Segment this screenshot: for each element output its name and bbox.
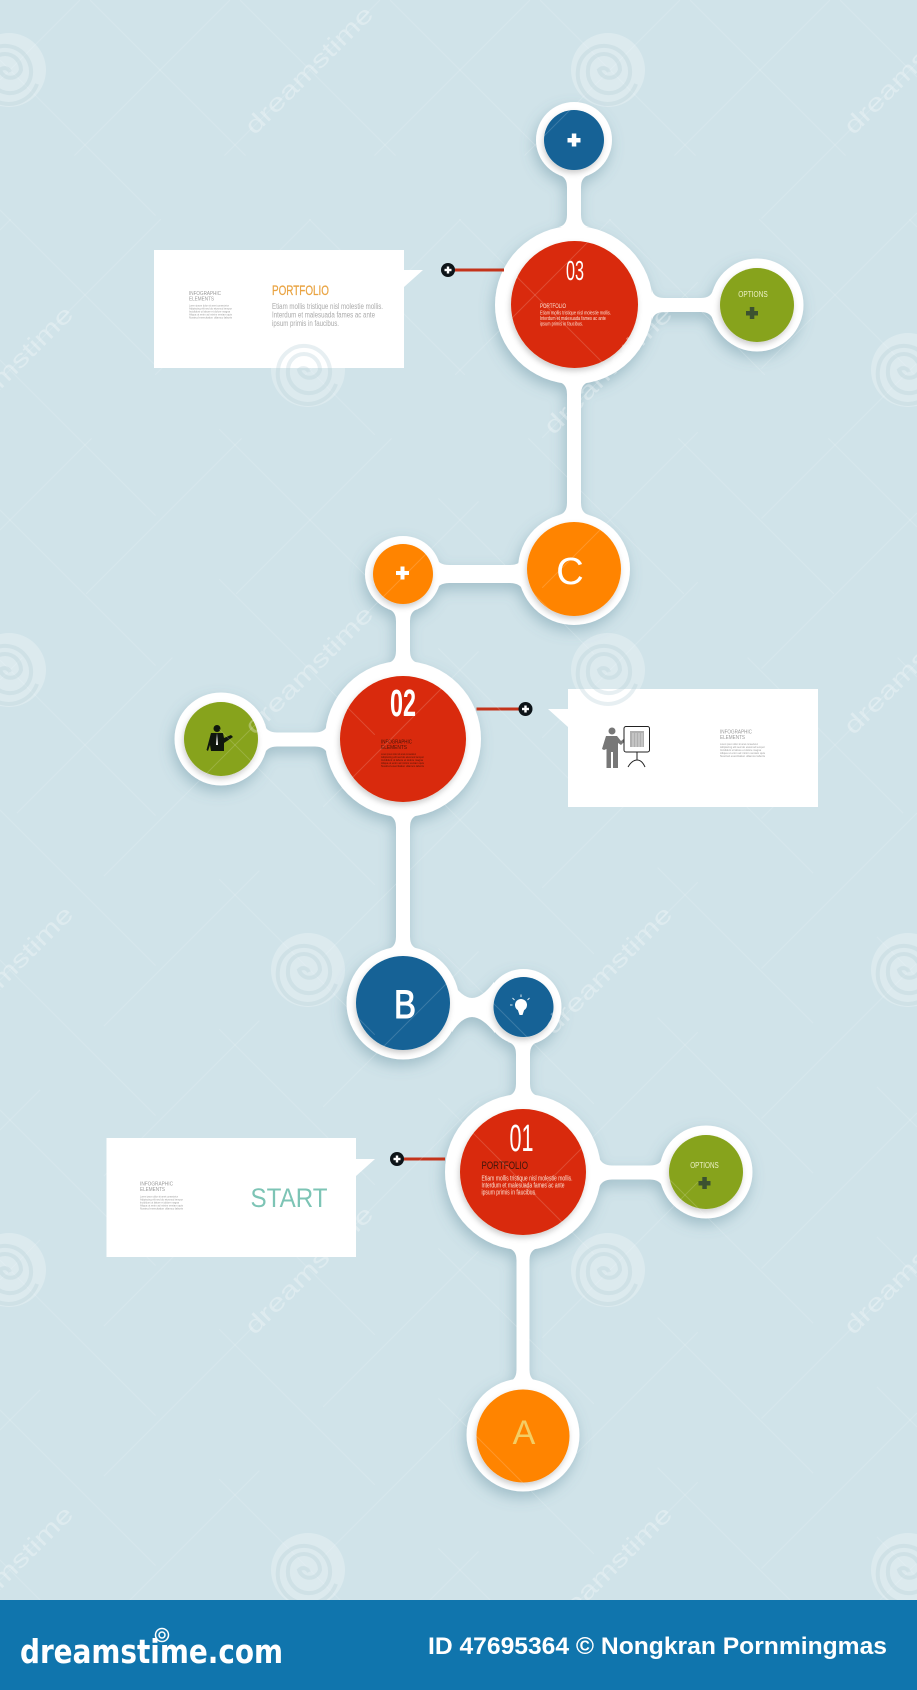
text: portfolio description: Etiam mollis tristique nisl molestie mollis. (272, 302, 383, 311)
text: infographic elements: Aliqua ut enim ad minim veniam quis (720, 751, 766, 755)
connector network: white rings and necks (174, 102, 804, 1492)
pointer: step 03 (441, 263, 504, 277)
footer logo text: dreamstime.com (20, 1632, 283, 1671)
text: infographic elements: ELEMENTS (189, 296, 214, 302)
text: step 03 portfolio: Etiam mollis tristique nisl molestie mollis. (540, 310, 611, 316)
text: infographic elements: Adipiscing elit sed do eiusmod tempor (189, 306, 232, 310)
orange A node: A (513, 1414, 536, 1452)
blue B node (356, 956, 450, 1050)
text: step 03 portfolio (540, 303, 611, 328)
text: infographic elements (140, 1182, 184, 1210)
text: portfolio description (272, 302, 383, 328)
text: step 03 portfolio: Interdum et malesuada fames ac ante (540, 316, 606, 322)
number 02: 02 (390, 683, 416, 725)
text: step 02 elements: Incididunt ut labore et dolore magna (381, 758, 423, 762)
text: infographic elements: ELEMENTS (140, 1187, 165, 1193)
text: step 03 portfolio: PORTFOLIO (540, 303, 566, 310)
green options node top (720, 268, 794, 342)
text: infographic elements: Nostrud exercitation ullamco laboris (140, 1206, 184, 1210)
green options node bottom: OPTIONS (690, 1161, 719, 1170)
watermark overlay: dreamstime (240, 1201, 379, 1340)
text: infographic elements: Incididunt ut labore et dolore magna (140, 1200, 179, 1204)
orange C node (527, 522, 621, 616)
text: step 03 portfolio: ipsum primis in faucibus. (540, 322, 583, 328)
text: step 02 elements: Adipiscing elit sed do eiusmod tempor (381, 755, 424, 759)
text: infographic elements: Incididunt ut labore et dolore magna (189, 310, 230, 314)
text: step 02 elements: Nostrud exercitation ullamco laboris (381, 764, 425, 768)
pointer: step 02 (476, 702, 532, 716)
watermark overlay: dreamstime (539, 301, 678, 440)
footer credit: ID 47695364 © Nongkran Pornmingmas (428, 1633, 887, 1660)
text: infographic elements: Lorem ipsum dolor sit amet consectetur (140, 1194, 178, 1198)
text: step 02 elements: Lorem ipsum dolor sit amet consectetur (381, 752, 416, 756)
watermark overlay: dreamstime (539, 901, 678, 1040)
blue B node: B (394, 983, 416, 1027)
text: step 02 elements (381, 740, 425, 768)
callout box: presenter (548, 689, 818, 807)
text: portfolio description: Interdum et malesuada fames ac ante (272, 310, 375, 320)
text: infographic elements: INFOGRAPHIC (189, 291, 221, 297)
step 02 circle (340, 676, 466, 802)
watermark overlay: dreamstime (240, 601, 379, 740)
text: step 01 description: ipsum primis in faucibus. (482, 1190, 537, 1196)
green node with businessman icon (184, 702, 258, 776)
text: infographic elements: Lorem ipsum dolor sit amet consectetur (720, 742, 758, 746)
blue plus node (544, 110, 604, 170)
text: portfolio description: ipsum primis in faucibus. (272, 319, 339, 328)
heading: step 01 portfolio: PORTFOLIO (482, 1160, 528, 1172)
footer bar (0, 1600, 917, 1690)
blue node with light bulb icon (494, 977, 554, 1037)
text: infographic elements: Aliqua ut enim ad minim veniam quis (140, 1204, 184, 1208)
text: step 01 description (482, 1176, 573, 1196)
text: infographic elements: Aliqua ut enim ad minim veniam quis (189, 312, 233, 316)
watermark overlay: dreamstime (539, 1501, 678, 1640)
number 01: 01 (510, 1118, 534, 1160)
step 03 circle (511, 241, 638, 368)
heading: portfolio: PORTFOLIO (272, 282, 329, 298)
text: infographic elements: Adipiscing elit sed do eiusmod tempor (140, 1198, 183, 1202)
green options node bottom (669, 1135, 743, 1209)
orange C node: C (556, 551, 584, 593)
text: step 02 elements: Aliqua ut enim ad minim veniam quis (381, 761, 425, 765)
text: step 02 elements: INFOGRAPHIC (381, 740, 412, 746)
text: step 01 description: Interdum et malesuada fames ac ante (482, 1182, 565, 1190)
orange plus node (373, 544, 433, 604)
step 01 circle (460, 1109, 586, 1235)
text: infographic elements (720, 730, 766, 758)
text: infographic elements: Lorem ipsum dolor sit amet consectetur (189, 304, 229, 308)
icon: presenter with board (602, 726, 650, 768)
heading: start: START (250, 1183, 328, 1213)
text: infographic elements: INFOGRAPHIC (720, 730, 752, 736)
text: infographic elements: ELEMENTS (720, 735, 745, 741)
pointer: step 01 (390, 1152, 445, 1166)
green options node top: OPTIONS (738, 290, 768, 299)
callout box: portfolio (154, 250, 423, 368)
watermark overlay: dreamstime (240, 1, 379, 140)
text: infographic elements: Nostrud exercitation ullamco laboris (720, 754, 766, 758)
orange A node (476, 1390, 570, 1482)
text: step 01 description: Etiam mollis tristique nisl molestie mollis. (482, 1176, 573, 1182)
text: step 02 elements: ELEMENTS (381, 745, 407, 751)
text: infographic elements: Nostrud exercitation ullamco laboris (189, 316, 233, 320)
number 03: 03 (566, 255, 584, 286)
text: infographic elements: INFOGRAPHIC (140, 1182, 173, 1188)
text: infographic elements: Incididunt ut labore et dolore magna (720, 748, 761, 752)
callout box: start (106, 1138, 375, 1257)
text: infographic elements (189, 291, 233, 320)
icon: footer logo spiral (156, 1628, 168, 1642)
text: infographic elements: Adipiscing elit sed do eiusmod tempor (720, 745, 765, 749)
